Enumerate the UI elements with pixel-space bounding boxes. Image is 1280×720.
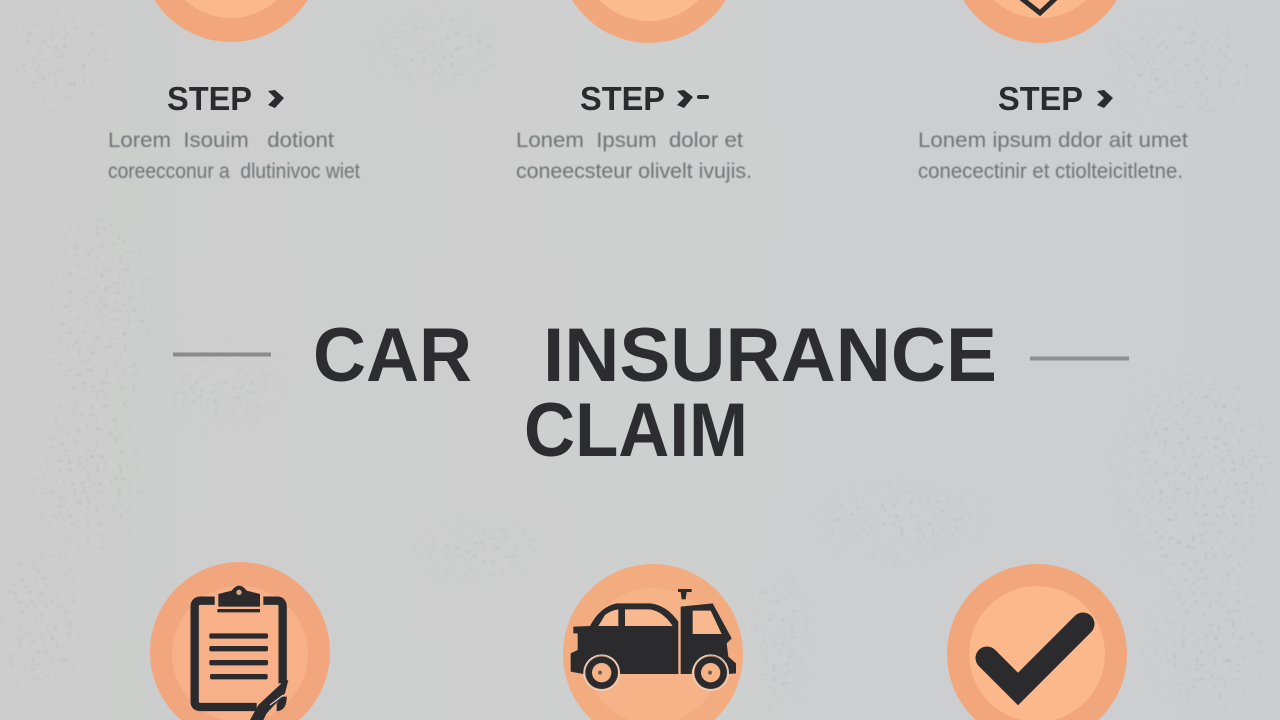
step label right: STEP (998, 80, 1083, 117)
icon: check mark badge (947, 564, 1127, 720)
orange badge: top middle (559, 0, 739, 43)
title: CLAIM (524, 388, 748, 473)
icon: car badge (563, 564, 743, 720)
description middle: coneecsteur olivelt ivujis. (516, 160, 752, 183)
description right: conecectinir et ctiolteicitletne. (918, 160, 1183, 183)
title: INSURANCE (543, 313, 997, 398)
description right (918, 129, 1188, 183)
panel: top step right (918, 0, 1188, 183)
orange badge: top right (950, 0, 1130, 43)
step label middle: STEP (580, 80, 665, 117)
title (173, 313, 1129, 473)
title: CAR (313, 313, 472, 398)
icon: clipboard badge (150, 562, 330, 720)
description left: coreecconur a dlutinivoc wiet (108, 160, 360, 183)
panel: top step middle (516, 0, 752, 183)
step label middle (580, 80, 709, 117)
step label left: STEP (167, 80, 252, 117)
description middle: Lonem Ipsum dolor et (516, 129, 743, 152)
description left (108, 129, 360, 183)
panel: top step left (108, 0, 360, 183)
description middle (516, 129, 752, 183)
description right: Lonem ipsum ddor ait umet (918, 129, 1188, 152)
description left: Lorem Isouim dotiont (108, 129, 334, 152)
orange badge: top left (140, 0, 322, 42)
